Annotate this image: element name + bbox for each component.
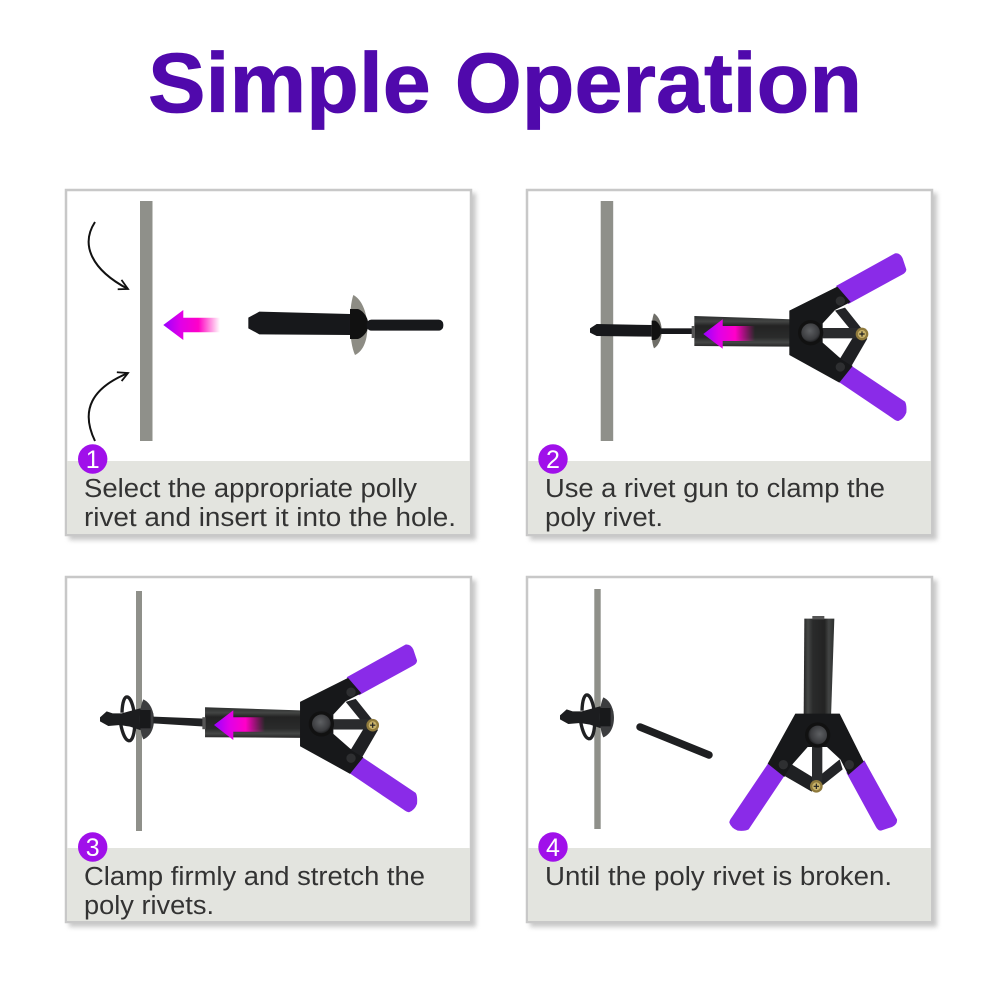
caption: Clamp firmly and stretch the	[84, 863, 425, 891]
step number	[78, 444, 107, 474]
icon: set rivet	[560, 695, 614, 739]
caption: poly rivets.	[84, 892, 214, 920]
panel: step 2	[527, 190, 937, 540]
icon: rivet in wall	[590, 313, 693, 348]
icon: curved arrow bottom	[89, 373, 128, 441]
step number	[78, 832, 107, 862]
caption: Until the poly rivet is broken.	[545, 863, 892, 891]
arrow: insert direction	[163, 310, 220, 340]
step number: 2	[546, 446, 560, 474]
caption: rivet and insert it into the hole.	[84, 504, 456, 532]
step number	[538, 444, 568, 474]
panel: step 4	[527, 577, 937, 927]
caption: Use a rivet gun to clamp the	[545, 475, 885, 503]
icon: rivet gun	[202, 644, 417, 812]
icon: rivet gun	[692, 253, 906, 421]
arrow: pull direction	[703, 319, 755, 349]
caption	[84, 475, 456, 532]
panel: step 3	[66, 577, 476, 927]
caption	[84, 863, 425, 920]
icon: rivet	[248, 295, 443, 355]
step number	[538, 832, 568, 862]
arrow: pull direction	[214, 710, 265, 740]
step number: 1	[86, 446, 100, 474]
caption	[545, 475, 885, 532]
caption: Select the appropriate polly	[84, 475, 417, 503]
step number: 3	[86, 834, 100, 862]
title: Simple Operation	[148, 36, 862, 130]
icon: curved arrow top	[89, 222, 128, 289]
caption: poly rivet.	[545, 504, 663, 532]
step number: 4	[546, 834, 560, 862]
panel: step 1	[66, 190, 476, 540]
icon: expanded rivet	[100, 697, 205, 741]
icon: rivet gun upright	[729, 616, 897, 831]
icon: broken stem	[640, 727, 709, 755]
